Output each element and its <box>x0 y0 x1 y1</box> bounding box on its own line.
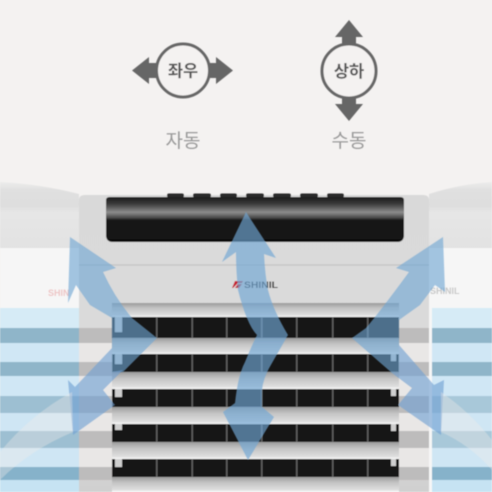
left side body <box>0 182 79 250</box>
vent opening <box>112 303 399 492</box>
arrow: lower left pale tail <box>0 392 73 480</box>
black display panel <box>106 197 404 242</box>
top buttons <box>167 194 344 198</box>
vent vertical ribs <box>156 303 368 492</box>
right side body <box>429 182 492 250</box>
right lower side <box>429 248 492 492</box>
icon: up-down swing symbol: 상하 <box>334 62 364 81</box>
side bands on panel edges <box>79 328 429 480</box>
arrow: upper right <box>352 237 445 373</box>
icon: left-right swing symbol: 좌우 <box>168 62 198 80</box>
left lower side <box>0 248 79 492</box>
air cooler device <box>0 182 492 492</box>
left cool air stripes <box>0 308 79 492</box>
arrow: center up and down <box>222 212 288 460</box>
center front panel <box>79 195 429 492</box>
label: auto: 자동 <box>166 130 200 152</box>
arrow: lower left head and stem <box>68 348 123 435</box>
side logo right: SHINIL <box>430 286 460 296</box>
icon: up-down swing symbol <box>322 20 376 121</box>
icon: left-right swing symbol <box>132 44 233 97</box>
airflow arrows <box>0 212 492 480</box>
side logo left: SHIN <box>48 288 70 298</box>
label: manual: 수동 <box>332 131 366 152</box>
panel seam <box>79 264 429 266</box>
right cool air stripes <box>432 308 492 492</box>
arrow: lower right pale tail <box>441 392 492 470</box>
arrow: upper left <box>68 237 157 372</box>
louver slats <box>112 303 399 492</box>
arrow: lower right head and stem <box>392 345 444 435</box>
louver clips <box>115 317 396 467</box>
brand logo <box>232 280 278 291</box>
brand logo: SHINIL <box>244 280 278 291</box>
